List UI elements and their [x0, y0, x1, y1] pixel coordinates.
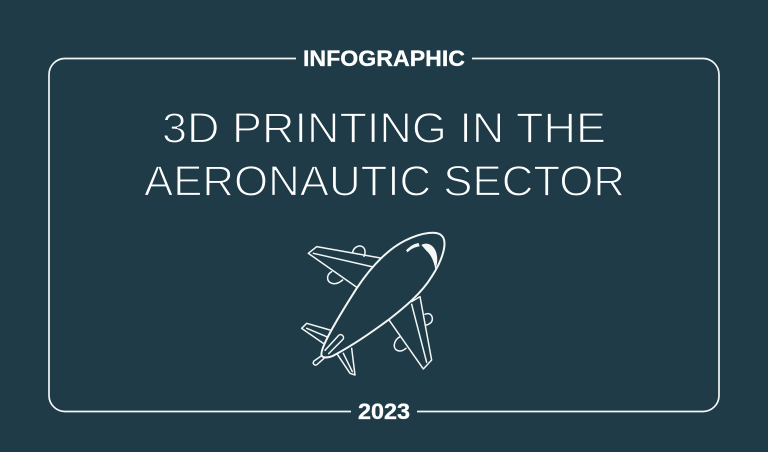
- label: infographic: INFOGRAPHIC: [303, 46, 465, 71]
- upper wing: [308, 246, 383, 288]
- lower wing: [389, 297, 432, 369]
- lower tail fin: [337, 348, 355, 375]
- upper tail fin: [302, 323, 330, 343]
- frame: [49, 58, 719, 412]
- icon: airplane: [302, 233, 444, 375]
- fuselage: [321, 233, 444, 357]
- label: year: 2023: [358, 399, 410, 424]
- window left: [406, 243, 420, 252]
- title line 1: 3D PRINTING IN THE: [162, 105, 606, 152]
- title: [144, 105, 625, 205]
- cockpit windows: [406, 243, 437, 270]
- tail cone: [313, 356, 324, 365]
- vertical stabilizer: [325, 335, 344, 354]
- title line 2: AERONAUTIC SECTOR: [144, 158, 625, 205]
- window right: [421, 244, 437, 270]
